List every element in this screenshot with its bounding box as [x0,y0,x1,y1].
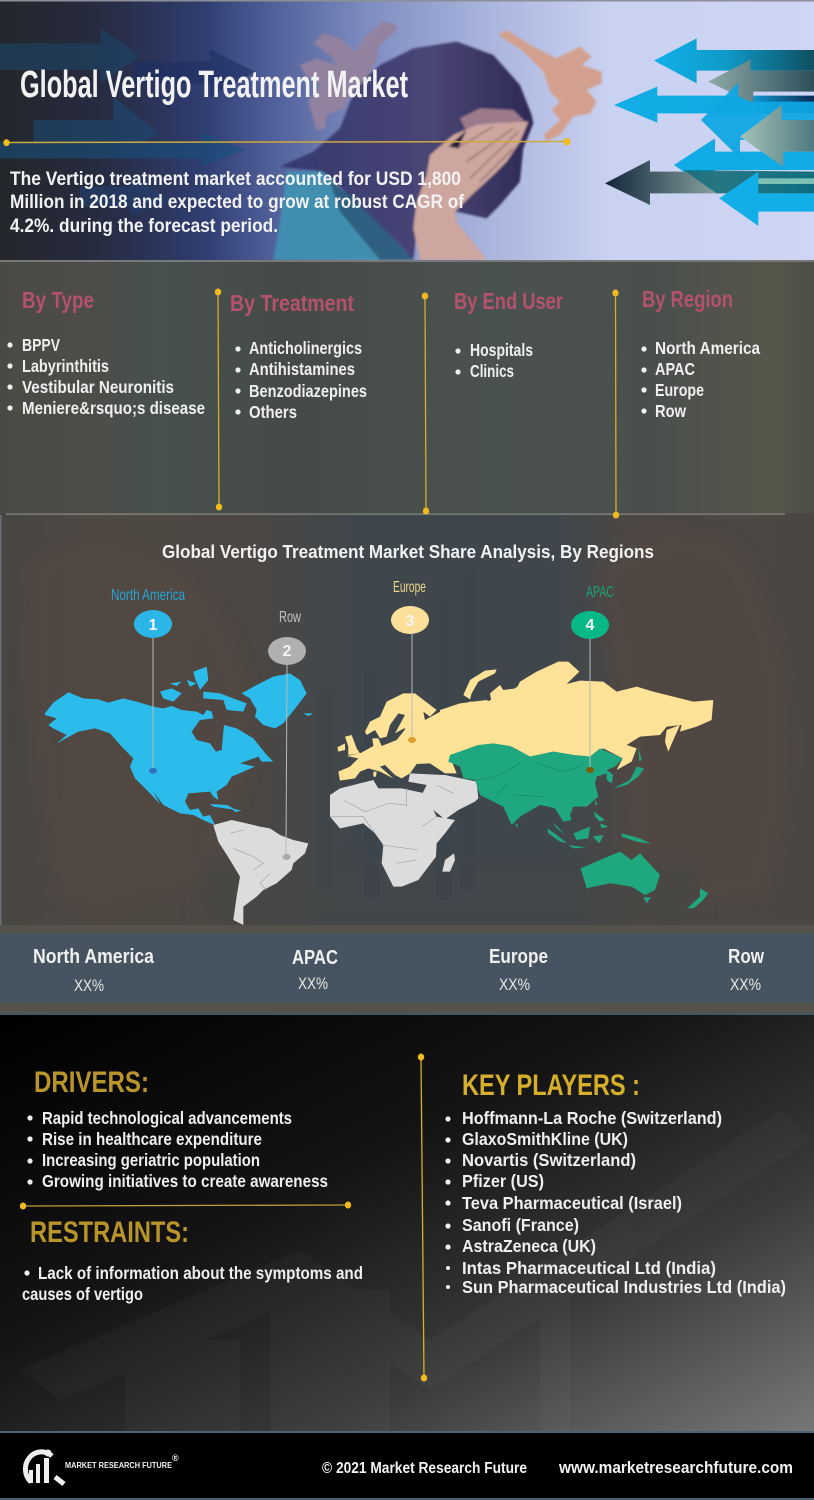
section: key players: KEY PLAYERS : [462,1069,640,1102]
section: key players: GlaxoSmithKline (UK) [462,1129,628,1149]
column: by end user: By End User [454,288,563,314]
icon: blue arrows right [605,38,814,226]
website: www.marketresearchfuture.com [558,1458,793,1477]
pin: row: Row [279,609,301,626]
chart title: Global Vertigo Treatment Market Share Analysis, By Regions [162,542,654,562]
column: by type: By Type [22,287,94,313]
panel: segmentation [0,260,814,518]
panel: hero banner [0,0,814,260]
section: key players [445,1069,786,1297]
column: by end user: Clinics [470,361,514,381]
column: by type: BPPV [22,335,60,355]
section: key players: Teva Pharmaceutical (Israel) [462,1193,682,1213]
table cell: apac: APAC [292,947,338,969]
pin: apac [571,584,614,639]
text block: market summary [10,169,465,237]
column: by treatment: Benzodiazepines [249,381,367,401]
table cell: europe: XX% [499,975,530,994]
section: restraints: causes of vertigo [22,1284,143,1304]
section: drivers: Rapid technological advancements [42,1108,292,1128]
column: by type: Meniere&rsquo;s disease [22,398,205,418]
panel: share table [0,925,814,1015]
section: key players: AstraZeneca (UK) [462,1236,596,1256]
table cell: row: Row [728,946,764,968]
column: by type [7,287,205,418]
section: key players: Sanofi (France) [462,1215,579,1235]
title: Global Vertigo Treatment Market [20,64,408,106]
column: by treatment: Antihistamines [249,359,355,379]
table cell: row [728,946,764,994]
section: drivers: DRIVERS: [34,1066,149,1099]
section: key players: Pfizer (US) [462,1171,544,1191]
column: by treatment: Anticholinergics [249,338,362,358]
section: restraints [22,1216,363,1304]
pin: europe: 3 [406,613,415,630]
column: by region: By Region [642,286,733,312]
column: by end user [454,288,563,381]
map: rest of world [213,773,478,925]
table cell: apac [292,947,338,993]
section: key players: Novartis (Switzerland) [462,1150,636,1170]
table cell: north america: North America [33,946,155,968]
panel: drivers, restraints and key players [0,1015,814,1432]
copyright: © 2021 Market Research Future [322,1460,527,1477]
logo: market research future [25,1450,179,1484]
column: by region: Row [655,401,686,421]
column: by region: North America [655,338,760,358]
section: drivers: Growing initiatives to create awareness [42,1171,328,1191]
text block: market summary: Million in 2018 and expected to grow at robust CAGR of [10,192,465,213]
table cell: north america: XX% [74,976,104,995]
logo: market research future: ® [172,1453,179,1463]
pin: europe [391,579,429,634]
pin: north america [111,587,185,638]
pin: europe: Europe [393,579,426,596]
panel: footer [0,1431,814,1500]
pin: row [268,609,306,665]
column: by treatment: By Treatment [230,290,354,316]
table cell: europe [489,946,548,994]
column: by end user: Hospitals [470,340,533,360]
logo: market research future: MARKET RESEARCH FUTURE [65,1461,173,1470]
panel: regional share map [0,513,814,935]
column: by treatment [230,290,367,422]
pin: apac: APAC [586,584,614,601]
pin: north america: North America [111,587,185,604]
section: key players: Hoffmann-La Roche (Switzerland) [462,1108,722,1128]
pin: north america: 1 [149,617,158,634]
pin: apac: 4 [586,617,595,634]
map: europe and russia [337,662,713,781]
pin: row: 2 [283,643,292,660]
column: by region: Europe [655,380,704,400]
table cell: apac: XX% [298,974,328,993]
text block: market summary: 4.2%. during the forecast period. [10,216,278,237]
divider: gold line with dots [3,138,571,146]
table cell: row: XX% [730,975,761,994]
map: north america [45,667,313,825]
column: by treatment: Others [249,402,297,422]
section: key players: Intas Pharmaceutical Ltd (India) [462,1258,716,1278]
section: drivers: Increasing geriatric population [42,1150,260,1170]
icon: woman covering face with hands [273,22,602,260]
column: by type: Labyrinthitis [22,356,109,376]
column: by type: Vestibular Neuronitis [22,377,174,397]
text block: market summary: The Vertigo treatment market accounted for USD 1,800 [10,169,461,190]
section: restraints: RESTRAINTS: [30,1216,189,1249]
table cell: europe: Europe [489,946,548,968]
map: asia pacific [448,743,708,908]
column: by region [641,286,760,421]
section: drivers: Rise in healthcare expenditure [42,1129,262,1149]
section: restraints: Lack of information about the symptoms and [38,1263,363,1283]
section: drivers [27,1066,328,1191]
column: by region: APAC [655,359,695,379]
table cell: north america [33,946,155,995]
icon: faded arrows left [0,28,255,215]
world map [45,632,713,925]
section: key players: Sun Pharmaceutical Industries Ltd (India) [462,1277,786,1297]
